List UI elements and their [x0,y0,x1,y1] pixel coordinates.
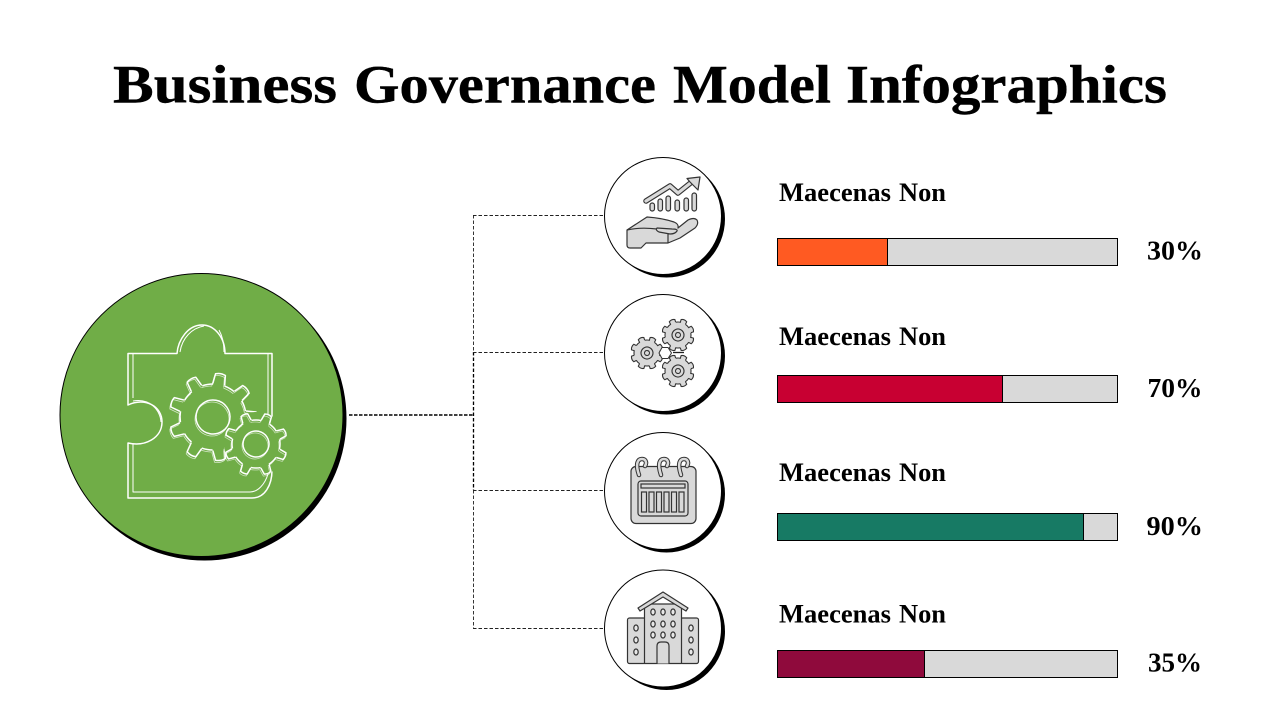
title: Business [113,54,337,114]
value: 70% [1148,373,1202,403]
icon circle 4 [604,570,725,690]
value: 35% [1148,648,1202,678]
icon: building [628,592,698,664]
icon: hand with growth chart [627,177,700,248]
main green circle with puzzle and gears icon [60,274,346,560]
value: 90% [1146,511,1203,541]
icon circle 1 [604,158,725,278]
label: Maecenas [779,458,891,487]
panel: item 1 [604,158,1203,278]
progress bar 30% [778,238,1118,266]
connector lines [349,215,604,628]
title: Model [673,54,831,114]
panel: item 2 [604,294,1202,414]
label: Maecenas [779,178,891,207]
icon: calendar [631,459,696,524]
progress bar 90% [778,514,1118,540]
label: Maecenas [779,322,891,351]
label: Non [899,458,947,487]
label: Non [899,322,947,351]
panel: item 3 [604,432,1203,552]
value: 30% [1147,236,1203,266]
panel: item 4 [604,570,1202,690]
label: Non [899,178,947,207]
label: Maecenas [779,600,891,628]
icon circle 3 [604,432,725,552]
label: Non [899,600,947,628]
title: Governance [354,54,656,114]
icon: three gears [626,314,699,392]
icon: puzzle piece with gears [128,325,297,498]
progress bar 35% [778,650,1118,678]
icon circle 2 [604,294,725,414]
progress bar 70% [778,376,1118,402]
title: Infographics [846,54,1167,114]
